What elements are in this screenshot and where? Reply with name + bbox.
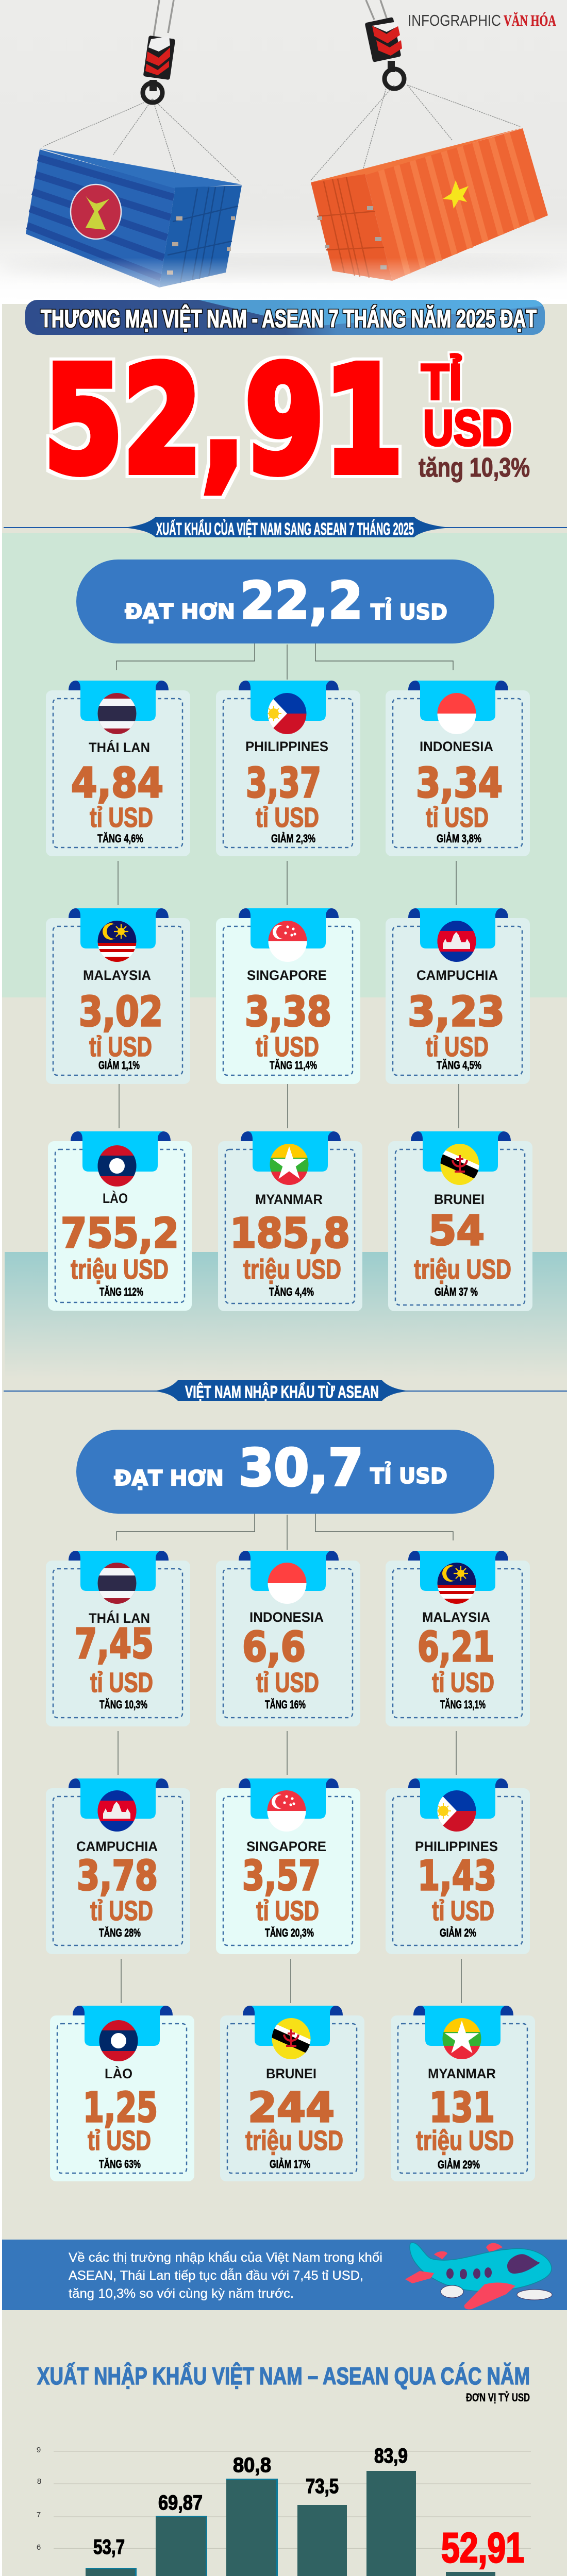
card: import Singapore: tỉ USD [256,1895,319,1926]
bar value labels: 73,5 [306,2475,339,2498]
card: export Philippines: PHILIPPINES [245,739,328,754]
connectors: exports [116,643,459,1128]
card: import Malaysia: tỉ USD [432,1667,494,1698]
card: import Thái Lan: tỉ USD [90,1667,153,1698]
card: import Campuchia: TĂNG 28% [99,1926,141,1939]
card: export Thái Lan: 4,84 [71,759,163,807]
card: import Campuchia [46,1778,190,1954]
card: import Brunei: triệu USD [245,2125,343,2156]
card: export Indonesia: tỉ USD [426,802,489,833]
chart gridlines [48,2451,531,2576]
card: export Singapore: 3,38 [245,988,331,1036]
card: export Campuchia: tỉ USD [426,1031,489,1062]
card: import Philippines: tỉ USD [432,1895,494,1926]
card: export Campuchia: TĂNG 4,5% [437,1059,481,1072]
card: import Thái Lan: THÁI LAN [89,1610,150,1626]
card: export Campuchia [386,908,530,1084]
card: export Thái Lan: THÁI LAN [89,739,150,755]
bar value labels: 52,91 [441,2524,524,2571]
card: import Malaysia [386,1551,530,1726]
headline unit: USD [423,400,512,456]
card: export Campuchia: 3,23 [408,988,505,1036]
card: export Philippines: 3,37 [246,759,321,807]
card: import Campuchia: CAMPUCHIA [76,1839,158,1854]
card: import Indonesia: 6,6 [242,1623,306,1671]
chart axis labels: 9 [37,2446,41,2454]
card: import Malaysia: MALAYSIA [422,1609,490,1625]
card: export Myanmar: MYANMAR [255,1192,323,1207]
card: import Philippines [386,1778,530,1954]
icon: cartoon airplane [405,2243,552,2310]
card: import Malaysia: TĂNG 13,1% [440,1698,486,1711]
card: export Myanmar [218,1131,362,1311]
card: import Thái Lan: TĂNG 10,3% [99,1698,147,1711]
card: import Myanmar: 131 [429,2084,495,2131]
total pill: exports [76,560,494,643]
card: export Philippines: tỉ USD [256,802,319,833]
card: import Campuchia: tỉ USD [90,1895,153,1926]
card: export Brunei: 54 [428,1207,485,1255]
card: import Malaysia: 6,21 [418,1623,494,1671]
icon: blue ASEAN container [26,0,242,287]
logo: Infographic Văn Hóa: INFOGRAPHIC [408,11,501,29]
callout banner [2,2240,567,2310]
headline unit [421,354,512,456]
card: export Malaysia: 3,02 [79,988,163,1036]
bar value labels: 83,9 [374,2445,408,2467]
card: export Thái Lan [46,681,190,856]
section heading: imports: VIỆT NAM NHẬP KHẨU TỪ ASEAN [185,1382,379,1401]
total pill: exports: 22,2 [240,571,363,631]
card: import Myanmar: triệu USD [416,2125,514,2156]
callout text: Về các thị trường nhập khẩu của Việt Nam trong khối [69,2250,382,2265]
connectors: imports [116,1514,461,2003]
card: import Lào: LÀO [105,2065,132,2081]
card: export Singapore [216,908,360,1084]
callout text [69,2250,382,2301]
total pill: imports: 30,7 [239,1438,363,1498]
card: import Philippines: GIẢM 2% [440,1926,476,1939]
card: export Philippines [216,681,360,856]
card: import Myanmar: GIẢM 29% [438,2158,480,2171]
card: export Brunei: BRUNEI [434,1192,485,1207]
card: export Brunei: GIẢM 37 % [435,1285,478,1298]
card: import Brunei [220,2006,364,2181]
card: import Singapore: SINGAPORE [246,1839,326,1854]
card: import Singapore [216,1778,360,1954]
headline number: 52,91 [44,335,403,505]
card: export Malaysia: GIẢM 1,1% [98,1059,140,1072]
card: export Myanmar: triệu USD [243,1254,341,1285]
card: export Lào: LÀO [103,1190,128,1206]
card: import Brunei: GIẢM 17% [270,2158,310,2171]
card: export Thái Lan: tỉ USD [90,802,153,833]
card: export Brunei: triệu USD [414,1254,511,1285]
card: import Indonesia: TĂNG 16% [265,1698,306,1711]
card: export Malaysia: tỉ USD [89,1031,152,1062]
card: import Campuchia: 3,78 [77,1852,158,1900]
bar value labels: 69,87 [158,2492,203,2514]
card: export Malaysia: MALAYSIA [83,968,151,983]
total pill: exports: TỈ USD [371,597,447,624]
card: import Singapore: 3,57 [242,1852,321,1900]
card: import Philippines: PHILIPPINES [415,1839,498,1854]
card: export Indonesia: 3,34 [416,759,503,807]
total pill: imports: TỈ USD [370,1461,447,1488]
card: import Myanmar: MYANMAR [428,2066,496,2081]
card: import Lào: tỉ USD [88,2125,151,2156]
bar value labels: 53,7 [93,2536,125,2558]
card: export Malaysia [46,908,190,1084]
card: export Lào [48,1131,192,1311]
card: export Philippines: GIẢM 2,3% [271,832,315,845]
icon: orange Vietnam container [310,0,548,281]
card: import Lào: 1,25 [83,2084,158,2131]
bar value labels [93,2445,524,2571]
card: export Singapore: SINGAPORE [247,968,327,983]
card: export Indonesia: INDONESIA [420,739,493,754]
card: export Myanmar: 185,8 [230,1210,350,1257]
card: export Lào: triệu USD [71,1254,169,1285]
card: import Philippines: 1,43 [418,1852,496,1900]
card: import Thái Lan [46,1551,190,1726]
headline unit: TỈ [421,354,462,410]
card: export Campuchia: CAMPUCHIA [416,968,498,983]
card: export Myanmar: TĂNG 4,4% [269,1285,314,1298]
callout text: tăng 10,3% so với cùng kỳ năm trước. [69,2286,294,2301]
card: import Indonesia [216,1551,360,1726]
hero image: two hanging containers [0,0,567,304]
card: import Thái Lan: 7,45 [75,1620,154,1668]
card: export Lào: 755,2 [61,1210,179,1257]
chart unit: ĐƠN VỊ TỶ USD [466,2391,530,2404]
chart axis labels: 7 [37,2511,41,2519]
card: export Indonesia [386,681,530,856]
chart axis labels: 6 [37,2543,41,2552]
callout text: ASEAN, Thái Lan tiếp tục dẫn đầu với 7,45 tỉ USD, [69,2268,363,2283]
card: import Brunei: 244 [248,2084,335,2131]
chart axis labels [37,2446,41,2576]
card: export Lào: TĂNG 112% [99,1285,143,1298]
total pill: exports: ĐẠT HƠN [125,599,235,624]
card: import Indonesia: tỉ USD [256,1667,319,1698]
card: export Thái Lan: TĂNG 4,6% [97,832,143,845]
card: import Indonesia: INDONESIA [249,1609,324,1625]
bars [86,2471,495,2576]
card: import Lào [50,2006,194,2181]
total pill: imports: ĐẠT HƠN [114,1466,224,1490]
card: import Myanmar [391,2006,535,2181]
card: export Indonesia: GIẢM 3,8% [437,832,481,845]
bar chart [37,2445,531,2576]
card: import Lào: TĂNG 63% [99,2158,141,2171]
card: export Singapore: TĂNG 11,4% [270,1059,317,1072]
card: import Brunei: BRUNEI [266,2066,316,2081]
section heading: imports [4,1380,567,1401]
chart axis labels: 8 [37,2477,41,2486]
section heading: exports [4,517,567,538]
card: export Brunei [388,1131,532,1311]
bar value labels: 80,8 [233,2454,271,2477]
card: import Singapore: TĂNG 20,3% [265,1926,314,1939]
growth note: tăng 10,3% [419,453,530,483]
total pill: imports [76,1430,494,1514]
card: export Singapore: tỉ USD [256,1031,319,1062]
